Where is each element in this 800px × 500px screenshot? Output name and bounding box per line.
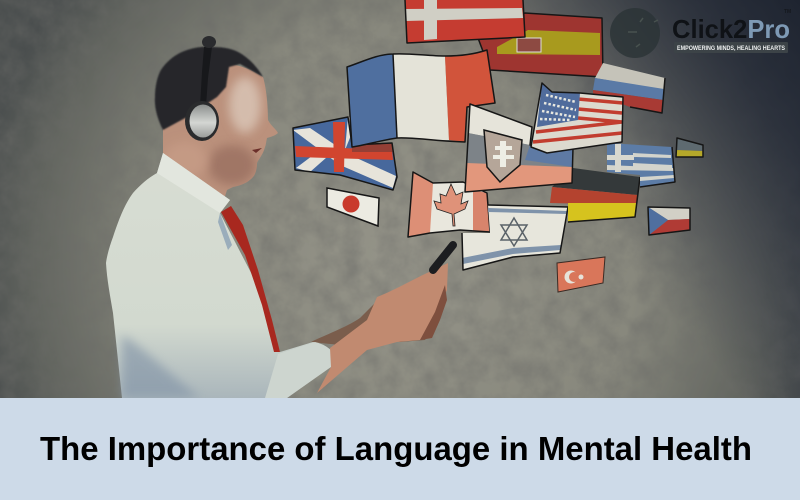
- far arm: [311, 290, 446, 345]
- flag: Russia: [593, 63, 665, 113]
- flag: Canada: [408, 172, 490, 237]
- title: The Importance of Language in Mental Health: [40, 430, 752, 467]
- flag: Japan: [327, 188, 379, 226]
- near arm and hands: [317, 263, 448, 393]
- logo emblem: [610, 8, 660, 58]
- flag: United States: [531, 83, 623, 153]
- flag: Denmark: [405, 0, 525, 43]
- man with headphones and phone: [106, 36, 453, 398]
- rolled sleeve: [265, 342, 331, 398]
- flags cluster: [293, 0, 703, 292]
- flag: Greece: [607, 143, 675, 187]
- trademark: TM: [784, 9, 791, 15]
- flag: Spain: [478, 13, 603, 77]
- flag: France: [347, 50, 495, 147]
- logo wordmark: Click2Pro: [672, 14, 790, 44]
- flag: Israel: [462, 205, 568, 270]
- logo: Click2Pro: EMPOWERING MINDS, HEALING HEARTS: [677, 45, 785, 52]
- shirt: [106, 153, 331, 398]
- logo tagline: [674, 42, 788, 53]
- background: concrete wall: [0, 0, 800, 398]
- neck and face: [162, 65, 278, 196]
- headphones: [200, 47, 212, 106]
- flag: Ukraine: [676, 138, 703, 157]
- flag: Germany: [550, 168, 640, 222]
- logo: Click2Pro: [610, 8, 791, 58]
- phone: [433, 245, 453, 270]
- coat of arms: [484, 130, 522, 182]
- flag: Czech Republic: [648, 207, 690, 235]
- flag: Turkey: [557, 257, 605, 292]
- hair: [155, 47, 263, 130]
- tie: [221, 206, 280, 352]
- flag: Slovakia: [465, 104, 573, 192]
- flag: United Kingdom: [293, 117, 397, 190]
- title band: [0, 398, 800, 500]
